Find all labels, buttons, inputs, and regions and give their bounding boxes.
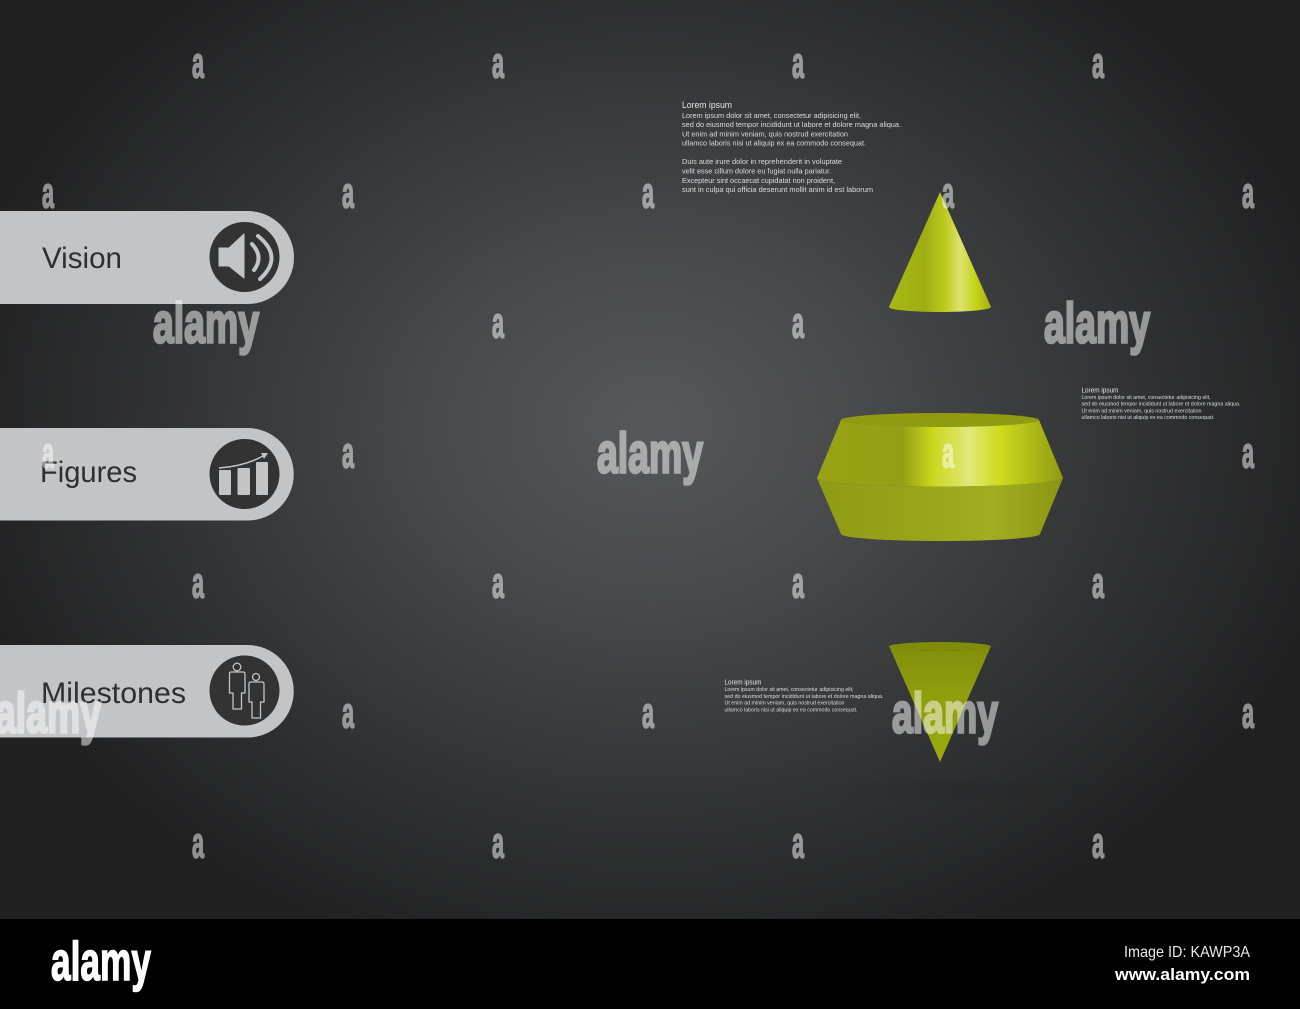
watermark pattern: a (942, 428, 954, 478)
text block: top cone description: Ut enim ad minim veniam, quis nostrud exercitation (682, 129, 848, 138)
watermark pattern (0, 38, 1254, 868)
panel: Milestones (0, 645, 294, 738)
chart: top cone segment (889, 192, 991, 312)
chart: middle segment (817, 413, 1063, 541)
watermark pattern: a (792, 558, 804, 608)
heading: Vision: Vision (42, 242, 122, 275)
text block: top cone description: Lorem ipsum (682, 100, 732, 110)
panel: Vision (0, 211, 294, 304)
band (0, 211, 294, 304)
text block: middle section description: Ut enim ad minim veniam, quis nostrud exercitation (1082, 408, 1202, 414)
watermark pattern: alamy (1044, 292, 1150, 356)
watermark pattern: a (192, 38, 204, 88)
lower frustum (817, 478, 1063, 541)
footer bar (0, 919, 1300, 1009)
text block: bottom cone description: Ut enim ad minim veniam, quis nostrud exercitation (724, 701, 844, 707)
text block: top cone description: ullamco laboris nisi ut aliquip ex ea commodo consequat. (682, 139, 866, 148)
icon: speaker (210, 222, 280, 292)
icon: two people (210, 656, 280, 726)
watermark pattern: a (792, 38, 804, 88)
inverted cone body (889, 646, 991, 762)
text block: middle section description: sed do eiusmod tempor incididunt ut labore et dolore magna aliqua. (1082, 402, 1241, 408)
watermark pattern: a (192, 558, 204, 608)
watermark pattern: a (192, 818, 204, 868)
footer logo: alamy (51, 930, 151, 992)
watermark pattern: a (42, 168, 54, 218)
watermark pattern: a (642, 688, 654, 738)
watermark pattern: a (792, 298, 804, 348)
watermark pattern: a (492, 38, 504, 88)
watermark pattern: alamy (597, 422, 703, 486)
watermark pattern: a (942, 168, 954, 218)
text block: middle section description: Lorem ipsum (1082, 388, 1119, 394)
text block: bottom cone description: Lorem ipsum dolor sit amet, consectetur adipisicing elit, (724, 687, 854, 693)
panel: Figures (0, 428, 294, 520)
watermark pattern: a (342, 428, 354, 478)
watermark pattern: a (1242, 688, 1254, 738)
watermark pattern: a (1242, 168, 1254, 218)
watermark pattern: alamy (153, 292, 259, 356)
band (0, 645, 294, 738)
band (0, 428, 294, 520)
icon: bar chart with arrow (210, 439, 280, 509)
watermark pattern: a (792, 818, 804, 868)
text block: top cone description: velit esse cillum dolore eu fugiat nulla pariatur. (682, 166, 831, 176)
text block: top cone description: Lorem ipsum dolor sit amet, consectetur adipisicing elit, (682, 111, 861, 120)
text block: bottom cone description: ullamco laboris nisi ut aliquip ex ea commodo consequat. (724, 707, 858, 713)
text block: top cone description: Duis aute irure dolor in reprehenderit in voluptate (682, 157, 842, 166)
upper frustum (817, 420, 1063, 486)
text block: middle section description: Lorem ipsum dolor sit amet, consectetur adipisicing elit, (1082, 395, 1211, 401)
watermark pattern: a (1242, 428, 1254, 478)
watermark pattern: a (492, 558, 504, 608)
text block: middle section description: ullamco laboris nisi ut aliquip ex ea commodo consequat. (1082, 415, 1215, 421)
top rim (889, 642, 991, 651)
watermark pattern: a (42, 428, 54, 478)
text block: bottom cone description: sed do eiusmod tempor incididunt ut labore et dolore magna aliqua. (724, 694, 884, 700)
watermark pattern: a (1092, 558, 1104, 608)
footer url: www.alamy.com (1114, 965, 1250, 984)
heading: Figures: Figures (40, 456, 137, 489)
text block: top cone description (682, 100, 901, 194)
text block: bottom cone description (724, 680, 884, 713)
footer image id: Image ID: KAWP3A (1124, 944, 1250, 961)
top rim (841, 413, 1039, 427)
watermark pattern: alamy (892, 682, 998, 746)
text block: top cone description: sunt in culpa qui officia deserunt mollit anim id est laborum (682, 185, 873, 194)
watermark pattern: a (1092, 38, 1104, 88)
heading: Milestones: Milestones (41, 677, 186, 710)
text block: top cone description: Excepteur sint occaecat cupidatat non proident, (682, 176, 835, 185)
text block: top cone description: sed do eiusmod tempor incididunt ut labore et dolore magna aliqua. (682, 120, 901, 129)
watermark pattern: a (492, 818, 504, 868)
text block: middle section description (1082, 388, 1241, 421)
chart: bottom cone segment (889, 642, 991, 762)
watermark pattern: a (342, 168, 354, 218)
watermark pattern: a (492, 298, 504, 348)
watermark pattern: a (342, 688, 354, 738)
watermark pattern: a (1092, 818, 1104, 868)
text block: bottom cone description: Lorem ipsum (724, 680, 762, 686)
floor shadow (825, 776, 1105, 804)
watermark pattern: a (642, 168, 654, 218)
